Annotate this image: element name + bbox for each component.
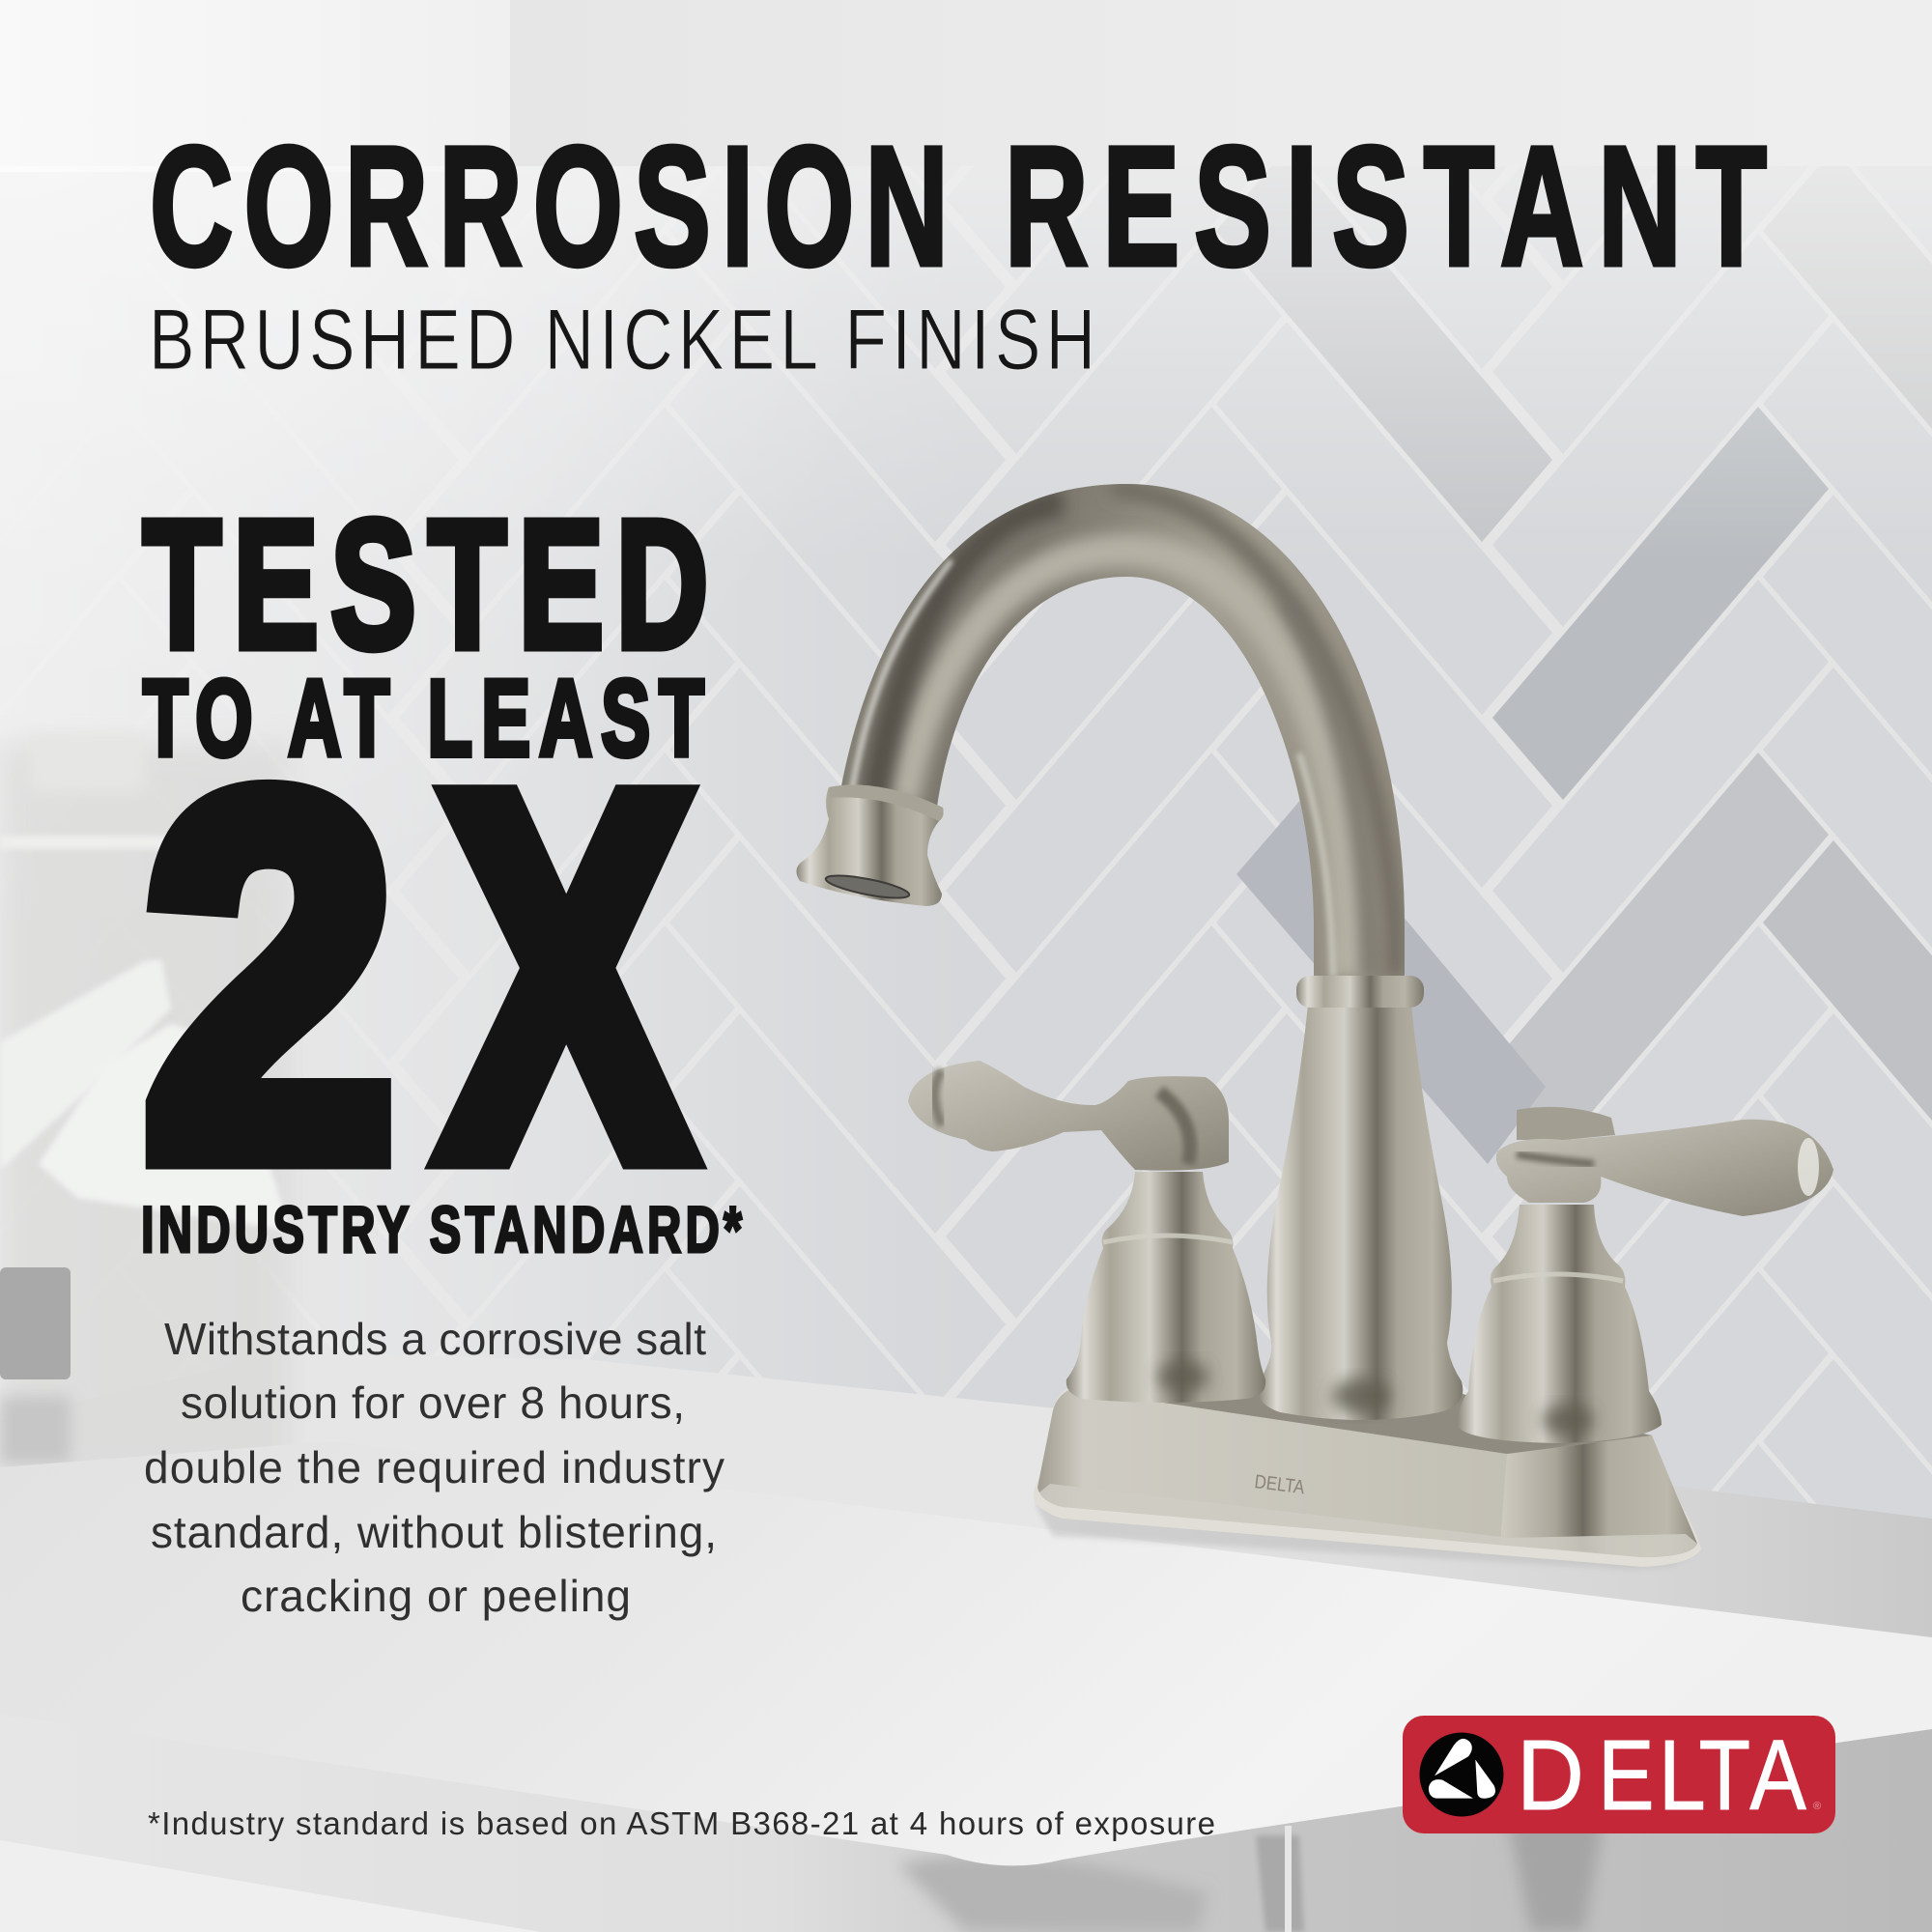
sink front apron [0, 1441, 1932, 1865]
big letter: X: X [443, 691, 691, 1261]
faucet [796, 484, 1833, 1570]
DELTA mark on base: DELTA [1253, 1471, 1306, 1498]
claim block: tested to at least 2X industry standard [141, 482, 742, 1266]
logo wordmark: D [1517, 1720, 1584, 1832]
lower shadow area with faucet reflection [0, 1642, 1932, 1932]
central body [1258, 1005, 1463, 1420]
spout [838, 484, 1405, 978]
neck ring [1296, 976, 1424, 1008]
spout nozzle and aerator [796, 785, 943, 906]
Delta logo [1403, 1716, 1835, 1833]
heading: corrosion resistant [150, 111, 1767, 300]
logo wordmark: ELTA [1598, 1719, 1806, 1832]
big number: 2: 2 [145, 691, 394, 1261]
body copy [144, 1314, 724, 1621]
registered mark: ® [1813, 1801, 1821, 1812]
right handle [1457, 1107, 1833, 1443]
subheading: brushed nickel finish: BRUSHED NICKEL FINISH [149, 292, 1095, 388]
faucet base [1034, 1387, 1701, 1570]
body copy: double the required industry [144, 1442, 724, 1492]
icon: Delta triangle mark [1420, 1733, 1503, 1816]
body copy: cracking or peeling [241, 1571, 631, 1621]
heading: corrosion resistant: CORROSION [150, 111, 949, 300]
footnote: *Industry standard is based on ASTM B368-21 at 4 hours of exposure [148, 1805, 1215, 1841]
body copy: standard, without blistering, [151, 1507, 717, 1557]
claim line: tested: TESTED [143, 482, 708, 687]
countertop surface [0, 1352, 1932, 1642]
claim line: industry standard: INDUSTRY STANDARD* [141, 1192, 742, 1266]
claim line: to at least: TO AT LEAST [143, 658, 704, 780]
heading: corrosion resistant: RESISTANT [1005, 111, 1767, 300]
left handle [908, 1061, 1265, 1403]
blurred jar and soap on the left [0, 734, 290, 1478]
body copy: Withstands a corrosive salt [164, 1314, 706, 1364]
body copy: solution for over 8 hours, [181, 1378, 685, 1428]
